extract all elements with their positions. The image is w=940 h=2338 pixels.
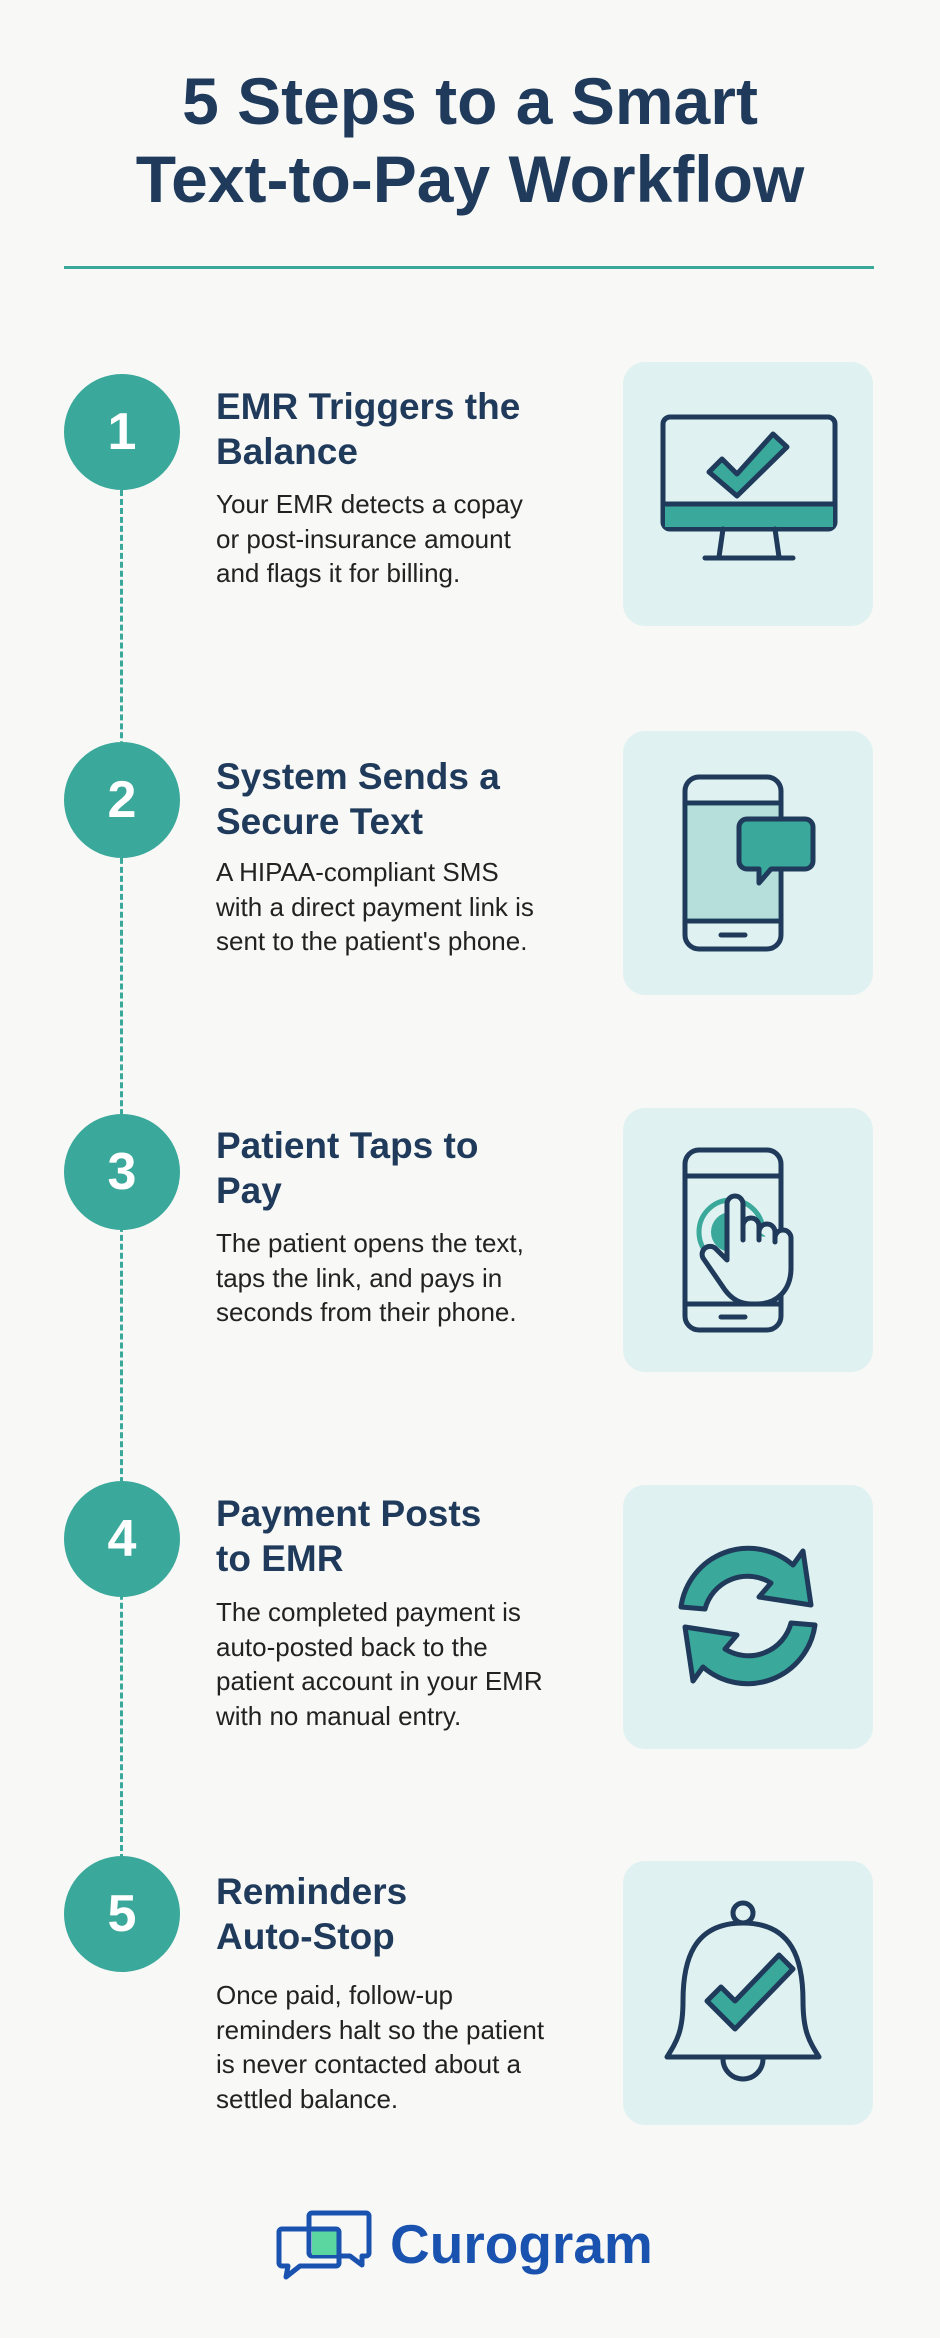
title: 5 Steps to a Smart bbox=[182, 64, 758, 138]
number circle 1: 1 bbox=[108, 403, 136, 461]
brand name: Curogram bbox=[390, 2213, 653, 2275]
step 2 bbox=[64, 742, 534, 956]
heading 1: EMR Triggers the bbox=[216, 386, 520, 427]
body 1: Your EMR detects a copay bbox=[216, 489, 523, 519]
heading 2 bbox=[216, 756, 500, 842]
body 2 bbox=[216, 857, 534, 956]
body 4 bbox=[216, 1597, 543, 1730]
number circle 1 bbox=[64, 374, 180, 490]
body 5: Once paid, follow-up bbox=[216, 1980, 453, 2010]
number circle 4 bbox=[64, 1481, 180, 1597]
step 3 bbox=[64, 1114, 524, 1327]
panel: phone tap icon bbox=[623, 1108, 873, 1372]
number circle 3: 3 bbox=[108, 1143, 136, 1201]
step 1 bbox=[64, 374, 523, 588]
heading 5: Auto-Stop bbox=[216, 1916, 395, 1957]
body 1: and flags it for billing. bbox=[216, 558, 460, 588]
logo bbox=[276, 2210, 653, 2280]
body 2: A HIPAA-compliant SMS bbox=[216, 857, 499, 887]
number circle 2 bbox=[64, 742, 180, 858]
panel: phone message icon bbox=[623, 731, 873, 995]
body 3: taps the link, and pays in bbox=[216, 1262, 502, 1292]
heading 5: Reminders bbox=[216, 1871, 407, 1912]
body 5: reminders halt so the patient bbox=[216, 2014, 544, 2044]
icon: chat bubbles bbox=[276, 2210, 372, 2280]
heading 4: to EMR bbox=[216, 1538, 343, 1579]
number circle 3 bbox=[64, 1114, 180, 1230]
body 4: auto-posted back to the bbox=[216, 1632, 488, 1662]
panel: monitor icon bbox=[623, 362, 873, 626]
heading 3: Pay bbox=[216, 1170, 282, 1211]
body 4: with no manual entry. bbox=[216, 1700, 461, 1730]
panel: bell check icon bbox=[623, 1861, 873, 2125]
heading 1 bbox=[216, 386, 520, 472]
number circle 4: 4 bbox=[108, 1510, 136, 1568]
step 5 bbox=[64, 1856, 544, 2114]
body 3 bbox=[216, 1228, 524, 1327]
title: Text-to-Pay Workflow bbox=[136, 142, 804, 216]
heading 3 bbox=[216, 1125, 478, 1211]
body 4: The completed payment is bbox=[216, 1597, 521, 1627]
body 3: seconds from their phone. bbox=[216, 1297, 517, 1327]
heading 2: System Sends a bbox=[216, 756, 500, 797]
body 1: or post-insurance amount bbox=[216, 524, 511, 554]
heading 4: Payment Posts bbox=[216, 1493, 481, 1534]
heading 4 bbox=[216, 1493, 481, 1579]
body 3: The patient opens the text, bbox=[216, 1228, 524, 1258]
number circle 5 bbox=[64, 1856, 180, 1972]
body 5: is never contacted about a bbox=[216, 2049, 521, 2079]
body 4: patient account in your EMR bbox=[216, 1666, 543, 1696]
heading 3: Patient Taps to bbox=[216, 1125, 478, 1166]
heading 5 bbox=[216, 1871, 407, 1957]
body 5 bbox=[216, 1980, 544, 2114]
number circle 2: 2 bbox=[108, 771, 136, 829]
body 2: sent to the patient's phone. bbox=[216, 926, 527, 956]
panel: sync arrows icon bbox=[623, 1485, 873, 1749]
body 2: with a direct payment link is bbox=[216, 892, 534, 922]
step 4 bbox=[64, 1481, 543, 1730]
heading 1: Balance bbox=[216, 431, 358, 472]
heading 2: Secure Text bbox=[216, 801, 423, 842]
body 1 bbox=[216, 489, 523, 588]
body 5: settled balance. bbox=[216, 2084, 398, 2114]
title bbox=[136, 64, 804, 216]
timeline dashed line bbox=[120, 490, 123, 1860]
number circle 5: 5 bbox=[108, 1885, 136, 1943]
